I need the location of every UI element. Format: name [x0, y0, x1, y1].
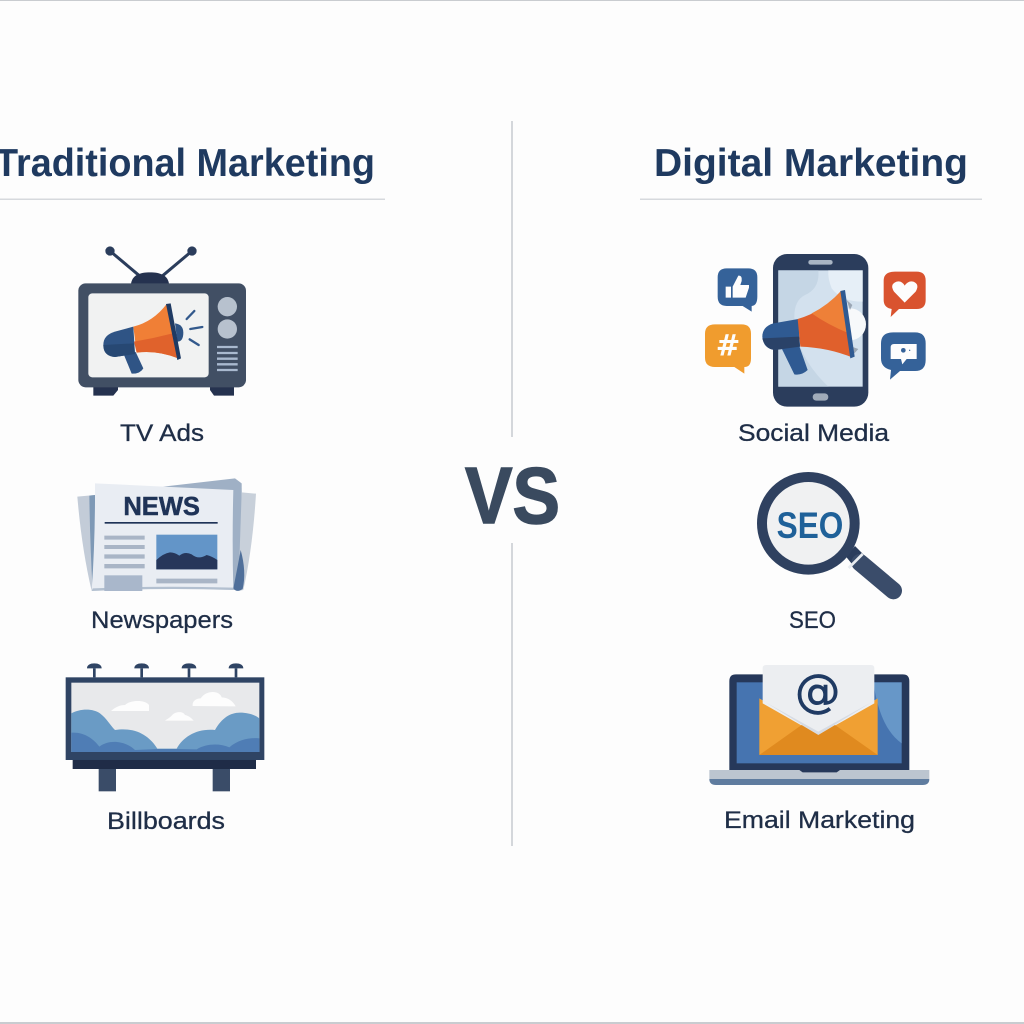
heading: Digital Marketing: Digital Marketing — [654, 142, 968, 185]
icon: newspaper: NEWS — [123, 491, 200, 521]
label: Billboards: Billboards — [107, 808, 225, 835]
icon: magnifying glass with SEO: SEO — [777, 504, 843, 546]
label: Email Marketing: Email Marketing — [724, 807, 915, 834]
icon: laptop with email envelope — [709, 665, 929, 785]
label: Newspapers: Newspapers — [91, 607, 233, 634]
icon: smartphone with megaphone and social bubbles: # — [716, 329, 740, 363]
heading: Traditional Marketing: Traditional Marketing — [0, 142, 375, 185]
icon: newspaper — [77, 478, 256, 591]
icon: smartphone with megaphone and social bubbles — [705, 254, 926, 407]
text: VS: VS — [465, 451, 560, 540]
icon: laptop with email envelope: @ — [795, 665, 840, 718]
label: SEO: SEO — [789, 607, 836, 634]
label: TV Ads: TV Ads — [120, 420, 204, 447]
panel: digital marketing — [640, 142, 982, 834]
icon: television with megaphone — [78, 246, 246, 396]
label: Social Media: Social Media — [738, 420, 890, 447]
panel: traditional marketing — [0, 142, 385, 835]
icon: magnifying glass with SEO — [762, 477, 893, 591]
icon: billboard — [66, 663, 264, 791]
